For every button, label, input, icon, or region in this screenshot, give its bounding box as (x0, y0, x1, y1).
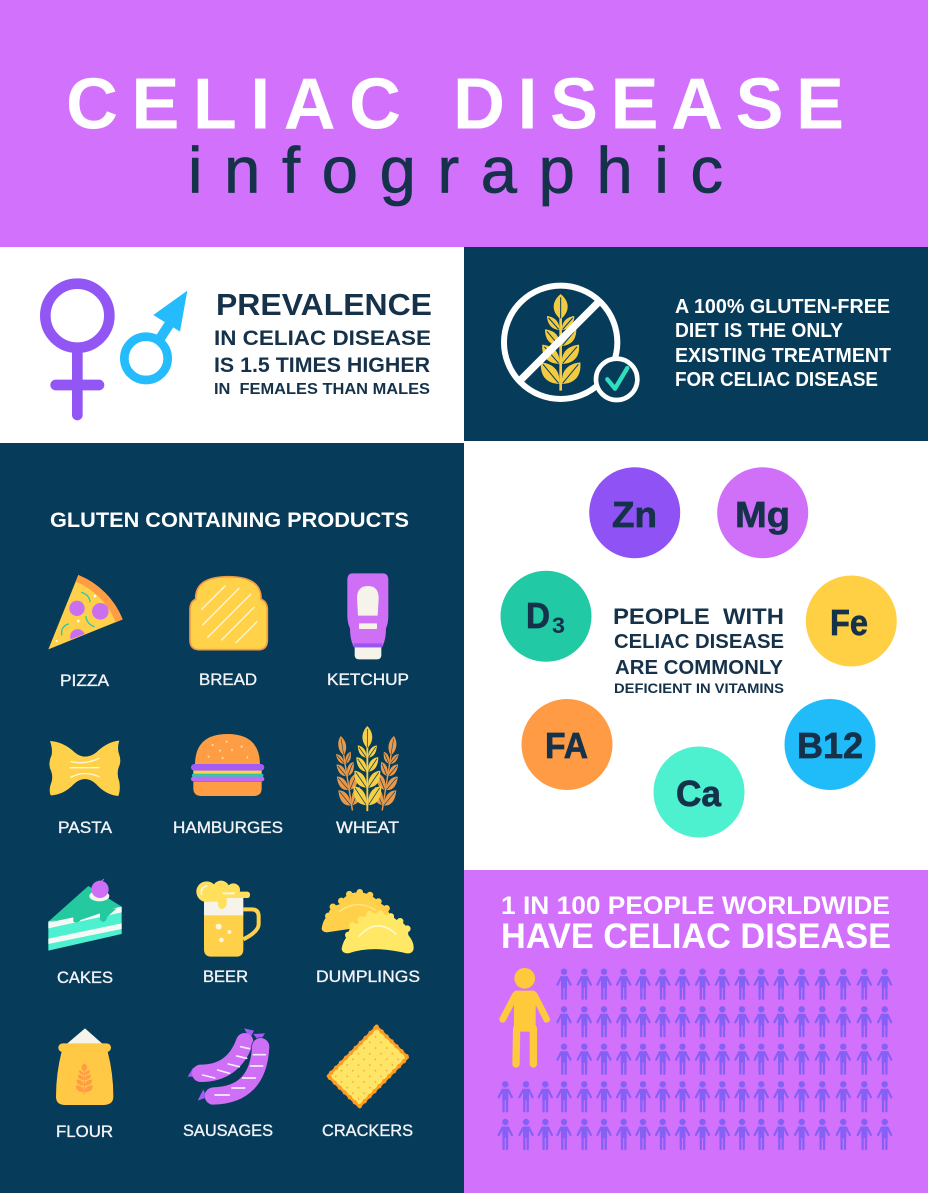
title: Celiac Disease: DISEASE (453, 64, 844, 144)
label: ketchup: KETCHUP (327, 670, 409, 689)
label: hamburges: HAMBURGES (173, 818, 283, 837)
icon: ketchup (347, 573, 388, 659)
icon: wheat (330, 726, 405, 812)
vitamin: Ca: Ca (676, 773, 722, 814)
icon: pasta (49, 741, 120, 796)
label: cakes: CAKES (57, 968, 113, 987)
icon: female and male symbols (45, 284, 187, 415)
vitamin: Zn: Zn (612, 494, 657, 535)
icon: dumplings (322, 892, 414, 953)
panel: worldwide statistic (464, 870, 928, 1193)
vitamin: Zn (589, 467, 680, 558)
text: treatment statement: EXISTING TREATMENT (675, 345, 891, 367)
icon: bread (190, 577, 267, 650)
vitamin: Ca (654, 746, 744, 838)
text: vitamin deficiency statement: ARE COMMONLY (615, 657, 784, 679)
icon: hamburger (191, 734, 264, 796)
chart: pictogram of people (499, 968, 891, 1149)
text: prevalence statement: PREVALENCE (216, 287, 432, 322)
title: Celiac Disease: CELIAC (66, 64, 401, 144)
vitamin: D3 (500, 571, 592, 662)
icon: sausages (188, 1028, 265, 1101)
subtitle: infographic: infographic (188, 134, 723, 206)
vitamin: FA: FA (545, 725, 588, 766)
heading: 1 in 100 people worldwide have celiac disease: 1 IN 100 PEOPLE WORLDWIDE (501, 892, 890, 920)
vitamin: FA (522, 699, 612, 790)
label: sausages: SAUSAGES (183, 1121, 273, 1140)
text: prevalence statement: IS 1.5 TIMES HIGHER (214, 354, 430, 377)
text: treatment statement (675, 296, 891, 391)
text: prevalence statement: IN CELIAC DISEASE (214, 327, 431, 350)
text: treatment statement: DIET IS THE ONLY (675, 320, 844, 342)
text: vitamin deficiency statement: PEOPLE WITH (613, 604, 784, 629)
vitamin: Fe (806, 576, 897, 666)
icon: cracker (328, 1027, 408, 1107)
text: vitamin deficiency statement (613, 604, 784, 696)
text: vitamin deficiency statement: CELIAC DISEASE (614, 631, 784, 653)
text: treatment statement: A 100% GLUTEN-FREE (675, 296, 890, 318)
panel: gluten-free diet (464, 247, 928, 441)
panel: title header (0, 0, 928, 247)
label: dumplings: DUMPLINGS (316, 967, 420, 986)
icon: beer (196, 881, 259, 957)
vitamin: Mg: Mg (735, 494, 790, 535)
icon: cake (48, 879, 122, 951)
vitamin: Fe: Fe (830, 602, 868, 643)
panel: gluten containing products (0, 443, 464, 1193)
label: crackers: CRACKERS (322, 1121, 413, 1140)
vitamin: D3: 3 (552, 613, 565, 638)
text: vitamin deficiency statement: DEFICIENT IN VITAMINS (614, 681, 784, 696)
label: pizza: PIZZA (60, 671, 110, 690)
icon: pizza (48, 575, 123, 649)
heading: 1 in 100 people worldwide have celiac disease (501, 892, 891, 956)
icon: flour sack (56, 1028, 113, 1105)
label: bread: BREAD (199, 670, 257, 689)
label: pasta: PASTA (58, 818, 113, 837)
text: prevalence statement: IN FEMALES THAN MALES (214, 381, 430, 398)
icon: crossed-out wheat with check mark (504, 286, 637, 400)
heading: 1 in 100 people worldwide have celiac disease: HAVE CELIAC DISEASE (501, 917, 891, 956)
label: flour: FLOUR (56, 1122, 113, 1141)
icon: highlighted person (503, 968, 547, 1064)
heading: gluten containing products: GLUTEN CONTAINING PRODUCTS (50, 509, 409, 532)
vitamin: B12: B12 (797, 725, 863, 766)
text: treatment statement: FOR CELIAC DISEASE (675, 369, 878, 391)
vitamin: B12 (784, 699, 876, 790)
label: beer: BEER (203, 967, 248, 986)
title: Celiac Disease (66, 64, 844, 144)
panel: prevalence (0, 247, 464, 443)
text: prevalence statement (214, 287, 432, 398)
label: wheat: WHEAT (336, 818, 399, 837)
panel: vitamin deficiencies (464, 441, 928, 870)
vitamin: D3: D (526, 595, 550, 636)
vitamin: Mg (717, 467, 808, 558)
